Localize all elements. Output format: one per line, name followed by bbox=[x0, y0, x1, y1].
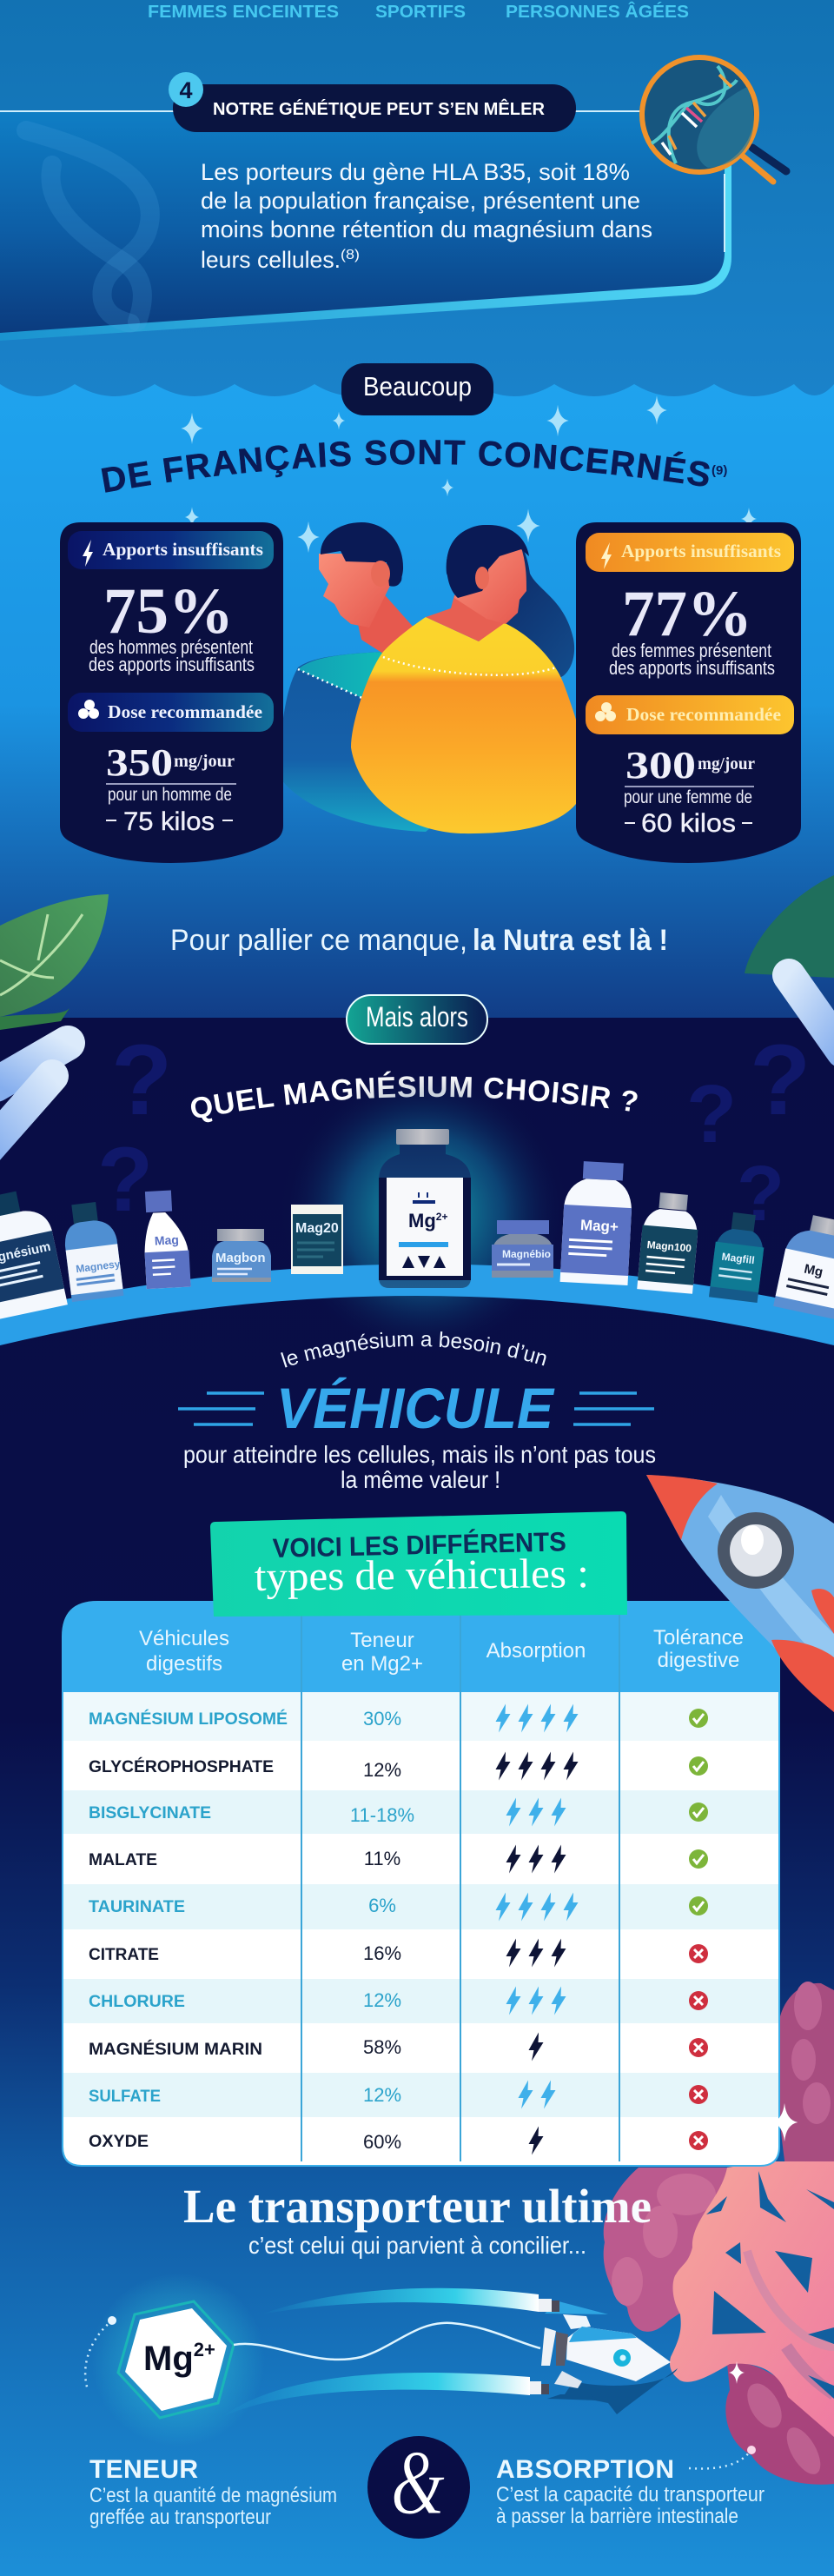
row: taurinate bbox=[89, 1893, 708, 1921]
illustration: ship bbox=[530, 2299, 678, 2414]
question marks: ? bbox=[737, 1151, 784, 1238]
pill: mais alors bbox=[347, 995, 487, 1044]
pill: apports insuffisants: Apports insuffisants bbox=[103, 539, 263, 560]
row: chlorure bbox=[89, 1987, 708, 2015]
stat caption: des apports insuffisants bbox=[609, 657, 775, 679]
stat: 75%: 75% bbox=[103, 575, 234, 647]
row: oxyde: 60% bbox=[363, 2131, 401, 2153]
banner: voici les différents types de véhicules: types de véhicules : bbox=[255, 1550, 589, 1600]
text: teneur bbox=[89, 2455, 337, 2529]
number badge bbox=[169, 72, 203, 107]
bottle: Magnébio bbox=[492, 1220, 553, 1278]
illustration: Mg hexagon: 2+ bbox=[194, 2339, 215, 2360]
row: sulfate: 12% bbox=[363, 2084, 401, 2106]
row: chlorure: CHLORURE bbox=[89, 1993, 185, 2011]
table header: Teneur bbox=[350, 1629, 414, 1652]
dose: 350 mg/jour: 350 bbox=[106, 741, 173, 784]
man bbox=[274, 522, 486, 832]
text: teneur: greffée au transporteur bbox=[89, 2506, 271, 2529]
panel: men bbox=[60, 522, 283, 863]
dotted arc with dot bbox=[85, 2316, 116, 2390]
row: magnésium liposomé: MAGNÉSIUM LIPOSOMÉ bbox=[89, 1710, 288, 1729]
row: taurinate: TAURINATE bbox=[89, 1898, 185, 1916]
stat caption bbox=[89, 636, 255, 675]
dose caption: 75 kilos bbox=[123, 807, 215, 836]
dose caption: pour une femme de bbox=[624, 787, 752, 807]
illustration: Mg hexagon bbox=[91, 2273, 265, 2447]
row: bisglycinate bbox=[89, 1797, 708, 1827]
audience tags: SPORTIFS bbox=[375, 3, 466, 22]
row: glycérophosphate: GLYCÉROPHOSPHATE bbox=[89, 1757, 274, 1776]
bottle: Mg+: Mg bbox=[803, 1262, 824, 1280]
text: pour atteindre les cellules bbox=[183, 1441, 656, 1493]
stat caption: des femmes présentent bbox=[612, 640, 771, 661]
dose: 300 mg/jour: 300 bbox=[626, 744, 696, 787]
row: magnésium liposomé bbox=[89, 1703, 708, 1733]
heading: le transporteur ultime: Le transporteur ultime bbox=[183, 2180, 652, 2233]
subheading: c’est celui qui parvient à concilier... bbox=[248, 2232, 586, 2259]
bottle: Magfill: Magfill bbox=[721, 1251, 755, 1266]
bottle: Mg+ bbox=[773, 1211, 834, 1319]
row: magnésium marin: 58% bbox=[363, 2036, 401, 2058]
shelf arc bbox=[0, 1264, 834, 1345]
dose: 350 mg/jour: mg/jour bbox=[174, 752, 235, 771]
row: sulfate bbox=[89, 2081, 708, 2108]
pill: dose recommandée bbox=[68, 693, 274, 732]
heading: de français sont concernés: (9) bbox=[712, 463, 727, 478]
panel body text: de la population française, présentent une bbox=[201, 188, 640, 214]
ampersand badge: & bbox=[391, 2432, 445, 2533]
dose caption: 60 kilos bbox=[641, 809, 736, 838]
heading: quel magnésium choisir: QUEL MAGNÉSIUM CHOISIR ? bbox=[191, 1071, 638, 1123]
pill: Beaucoup bbox=[341, 363, 493, 415]
exhaust trails bbox=[221, 2288, 539, 2418]
row: bisglycinate: BISGLYCINATE bbox=[89, 1804, 211, 1822]
text: le magnésium a besoin d'un: le magnésium a besoin d’un bbox=[281, 1331, 546, 1368]
main bottle: Mg2+: Mg bbox=[408, 1210, 436, 1232]
star near table bbox=[771, 2103, 798, 2141]
question marks: ? bbox=[750, 1025, 811, 1136]
dose: 350 mg/jour bbox=[106, 741, 236, 784]
panel body text: leurs cellules. bbox=[201, 247, 341, 273]
bottle: Magn100 bbox=[637, 1192, 701, 1294]
illustration: Mg hexagon: Mg bbox=[143, 2340, 194, 2378]
bottle: Magnesy bbox=[60, 1200, 124, 1302]
text: teneur: TENEUR bbox=[89, 2455, 198, 2484]
row: chlorure: 12% bbox=[363, 1989, 401, 2011]
table header: digestive bbox=[658, 1649, 739, 1672]
box: Mag20: Mag20 bbox=[295, 1221, 339, 1236]
row: citrate: 16% bbox=[363, 1942, 401, 1964]
bottles row bbox=[0, 1129, 834, 1322]
stat caption bbox=[609, 640, 775, 679]
text: pour atteindre les cellules: pour atteindre les cellules, mais ils n’ont pas tous bbox=[183, 1441, 656, 1468]
bottle: Magnesy: Magnesy bbox=[75, 1258, 121, 1275]
dose: 300 mg/jour bbox=[625, 744, 755, 787]
star near ship bbox=[729, 2361, 745, 2384]
table header bbox=[139, 1626, 744, 1676]
icon: magnifier with DNA bbox=[642, 57, 786, 182]
row: malate: MALATE bbox=[89, 1851, 157, 1869]
text: teneur: C’est la quantité de magnésium bbox=[89, 2484, 337, 2507]
bottle: Magn100: Magn100 bbox=[646, 1238, 692, 1254]
row: glycérophosphate: 12% bbox=[363, 1759, 401, 1781]
bottle: Magfill bbox=[709, 1211, 768, 1303]
sparkle stars bbox=[181, 395, 757, 553]
connection wave bbox=[234, 2323, 540, 2360]
dose caption: pour un homme de bbox=[108, 785, 232, 805]
table header: Tolérance bbox=[653, 1626, 744, 1650]
heading: véhicule: VÉHICULE bbox=[276, 1376, 555, 1440]
table header: Véhicules bbox=[139, 1627, 229, 1650]
row: malate: 11% bbox=[364, 1848, 400, 1869]
row: magnésium marin: MAGNÉSIUM MARIN bbox=[89, 2040, 262, 2059]
bottle: Magbon bbox=[212, 1229, 271, 1282]
illustration: rocket bbox=[646, 1475, 834, 1712]
row: malate bbox=[89, 1844, 708, 1874]
glow behind main bottle bbox=[281, 1069, 567, 1356]
table header: Absorption bbox=[486, 1639, 586, 1663]
bottle: Magnébio: Magnébio bbox=[502, 1248, 551, 1260]
pill: dose recommandée: Dose recommandée bbox=[108, 701, 262, 722]
dose caption bbox=[106, 785, 233, 836]
question marks: ? bbox=[97, 1129, 153, 1231]
illustration: left leaf and fingers bbox=[0, 894, 109, 1149]
main bottle: Mg2+: 2+ bbox=[436, 1211, 447, 1223]
row: glycérophosphate bbox=[89, 1752, 708, 1781]
dose: 300 mg/jour: mg/jour bbox=[698, 754, 755, 773]
bottle: Magnésium bbox=[0, 1185, 68, 1322]
pill: apports insuffisants bbox=[586, 533, 794, 572]
banner: voici les différents types de véhicules: VOICI LES DIFFÉRENTS bbox=[272, 1526, 566, 1564]
icon: ghost DNA bbox=[26, 130, 150, 323]
stat: 77%: 77% bbox=[622, 578, 752, 650]
row: magnésium marin bbox=[89, 2032, 708, 2061]
heading pill bbox=[173, 84, 576, 132]
text: absorption bbox=[496, 2455, 764, 2528]
audience tags bbox=[148, 1, 689, 22]
panel: genetics bbox=[0, 57, 786, 341]
pill: apports insuffisants bbox=[68, 531, 274, 569]
text: absorption: à passer la barrière intestinale bbox=[496, 2505, 738, 2528]
pill: apports insuffisants: Apports insuffisants bbox=[621, 541, 781, 561]
box: Mag20 bbox=[291, 1205, 343, 1274]
text: pour atteindre les cellules: la même valeur ! bbox=[341, 1466, 500, 1493]
text: absorption: ABSORPTION bbox=[496, 2455, 674, 2484]
row: sulfate: SULFATE bbox=[89, 2088, 161, 2106]
question marks bbox=[97, 1025, 811, 1238]
illustration: intestine bbox=[604, 1982, 834, 2485]
panel body text: (8) bbox=[341, 248, 360, 262]
pill: dose recommandée bbox=[586, 695, 794, 734]
illustration: man and woman bbox=[274, 522, 586, 833]
row: bisglycinate: 11-18% bbox=[350, 1804, 414, 1826]
pill: dose recommandée: Dose recommandée bbox=[626, 704, 781, 725]
heading: de français sont concernés: DE FRANÇAIS SONT CONCERNÉS bbox=[101, 440, 710, 493]
banner: voici les différents types de véhicules bbox=[210, 1511, 627, 1617]
panel body text bbox=[201, 159, 652, 273]
table header: digestifs bbox=[146, 1652, 222, 1676]
bottle: Mag: Mag bbox=[154, 1232, 179, 1248]
stat caption: des apports insuffisants bbox=[89, 654, 255, 675]
number badge: 4 bbox=[179, 77, 193, 103]
bottle: Mag+: Mag+ bbox=[580, 1217, 619, 1235]
ampersand badge bbox=[367, 2432, 470, 2539]
bottle: Mag+ bbox=[560, 1160, 634, 1285]
row: magnésium liposomé: 30% bbox=[363, 1708, 401, 1730]
audience tags: PERSONNES ÂGÉES bbox=[506, 1, 689, 22]
row: oxyde bbox=[89, 2126, 708, 2155]
statement: la Nutra est là: la Nutra est là ! bbox=[473, 924, 668, 957]
heading pill: NOTRE GÉNÉTIQUE PEUT S’EN MÊLER bbox=[213, 98, 546, 119]
panel body text: Les porteurs du gène HLA B35, soit 18% bbox=[201, 159, 630, 185]
pill: Beaucoup: Beaucoup bbox=[363, 371, 472, 402]
dotted connector bbox=[689, 2446, 756, 2468]
row: oxyde: OXYDE bbox=[89, 2133, 149, 2151]
woman bbox=[351, 525, 586, 833]
stat caption: des hommes présentent bbox=[89, 636, 253, 658]
question marks: ? bbox=[686, 1068, 737, 1160]
illustration: right leaf and finger bbox=[745, 875, 834, 1052]
row: taurinate: 6% bbox=[368, 1895, 396, 1916]
bottle: Magbon: Magbon bbox=[215, 1251, 266, 1265]
panel: women bbox=[576, 522, 801, 863]
text: absorption: C’est la capacité du transporteur bbox=[496, 2483, 764, 2506]
statement: la Nutra est là: Pour pallier ce manque, bbox=[170, 924, 467, 957]
main bottle: Mg2+ bbox=[379, 1129, 471, 1288]
row: citrate bbox=[89, 1938, 708, 1968]
dose caption bbox=[624, 787, 752, 838]
row: citrate: CITRATE bbox=[89, 1946, 159, 1964]
statement: la Nutra est là bbox=[170, 924, 668, 957]
heading: véhicule bbox=[178, 1376, 654, 1440]
pill: mais alors: Mais alors bbox=[366, 1001, 468, 1032]
panel body text: moins bonne rétention du magnésium dans bbox=[201, 216, 652, 242]
audience tags: FEMMES ENCEINTES bbox=[148, 3, 339, 22]
table bbox=[63, 1602, 779, 2166]
question marks: ? bbox=[111, 1025, 172, 1136]
table header: en Mg2+ bbox=[341, 1652, 423, 1676]
bottle: Mag bbox=[142, 1190, 191, 1289]
